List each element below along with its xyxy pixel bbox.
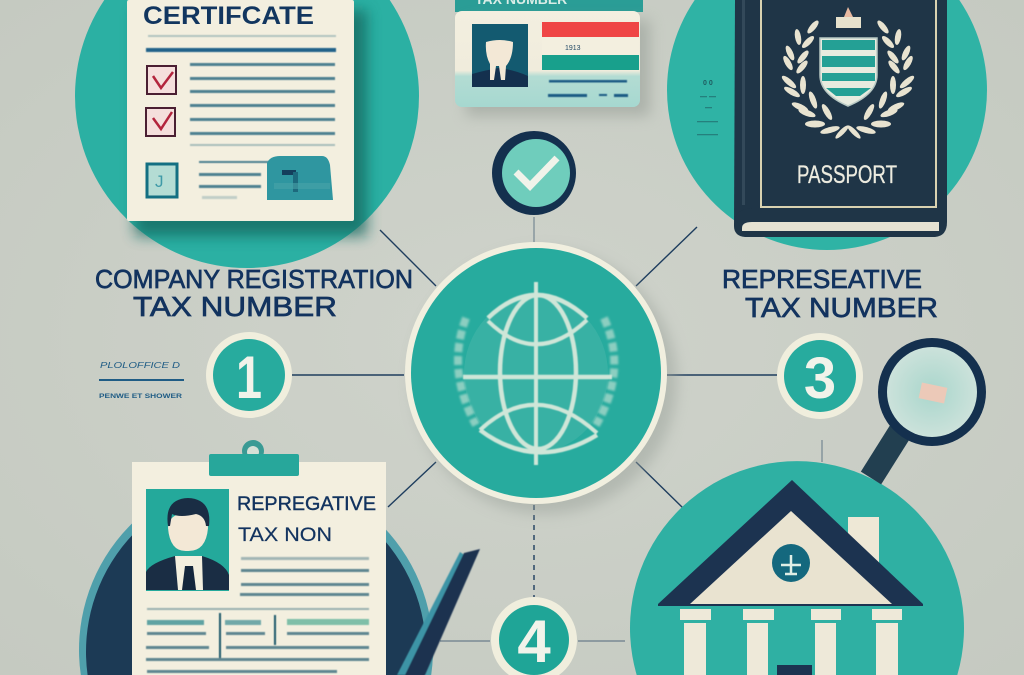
faded text beside passport: — <box>705 105 712 112</box>
columns <box>680 609 902 675</box>
id photo <box>472 24 528 87</box>
icon: magnifying glass <box>871 338 986 478</box>
certificate shadow <box>135 10 367 236</box>
small caption left: PENWE ET SHOWER <box>99 393 182 400</box>
pen <box>397 549 480 675</box>
dark circle backdrop <box>79 473 433 675</box>
red checkbox 1 <box>147 66 176 94</box>
passport cover <box>734 0 947 237</box>
crown <box>836 7 861 28</box>
certificate title: CERTIFCATE <box>143 2 314 30</box>
faded text beside passport <box>697 80 718 139</box>
spine <box>742 0 745 205</box>
card body <box>455 11 640 107</box>
panel: passport <box>667 0 987 250</box>
laurel <box>458 318 614 425</box>
faded text beside passport: — — <box>700 94 716 101</box>
gold border <box>761 0 936 207</box>
passport title: PASSPORT <box>797 161 897 189</box>
label: company registration tax number: COMPANY REGISTRATION <box>95 264 413 294</box>
teal seal box: J <box>155 172 164 191</box>
pediment <box>690 511 892 604</box>
certificate lines <box>146 35 336 199</box>
step 4 badge: 4 <box>517 608 551 675</box>
flag stripes <box>542 22 639 70</box>
step 1 badge <box>206 332 292 418</box>
central globe badge <box>405 242 677 514</box>
chimney <box>848 517 879 577</box>
panel: tax office building <box>630 461 964 675</box>
card text lines <box>548 80 628 97</box>
door <box>777 665 812 675</box>
faded text beside passport: 0 0 <box>703 80 713 87</box>
red checkbox 2 <box>146 108 175 136</box>
page edges <box>742 222 939 231</box>
label: company registration tax number <box>95 264 413 322</box>
badge shadow <box>413 250 677 514</box>
step 3 badge <box>777 333 863 419</box>
teal circle backdrop <box>75 0 419 268</box>
document subtitle: TAX NON <box>238 525 332 546</box>
panel: id card <box>455 0 650 116</box>
cover fold <box>735 208 947 228</box>
step 4 badge <box>491 597 577 675</box>
label: representative tax number <box>722 264 938 323</box>
faded text beside passport: ——— <box>697 119 718 126</box>
label: company registration tax number: TAX NUMBER <box>133 291 337 322</box>
card header strip <box>455 0 643 12</box>
roof <box>658 480 923 606</box>
globe fill <box>464 296 608 452</box>
teal circle backdrop <box>667 0 987 250</box>
step 3 badge: 3 <box>804 346 836 411</box>
document title: REPREGATIVE <box>237 494 376 515</box>
badge disc <box>405 242 667 504</box>
faded text beside passport: ——— <box>697 132 718 139</box>
label: representative tax number: REPRESEATIVE <box>722 264 922 294</box>
shield <box>820 38 877 106</box>
flag stripes: 1913 <box>565 45 581 52</box>
connector lines <box>292 217 822 641</box>
certificate sheet <box>127 0 354 221</box>
emblem <box>772 544 810 582</box>
teal blob <box>630 461 964 675</box>
portrait <box>146 489 229 591</box>
stamp <box>267 156 333 200</box>
globe <box>463 282 612 465</box>
panel: company certificate <box>75 0 419 268</box>
step 1 badge: 1 <box>236 344 262 411</box>
document lines <box>146 557 369 673</box>
label: representative tax number: TAX NUMBER <box>745 292 938 323</box>
teal seal box <box>147 164 177 197</box>
small caption left: PLOLOFFICE D <box>100 361 180 370</box>
icon: check badge <box>492 131 576 215</box>
card shadow <box>466 20 650 116</box>
document sheet <box>132 462 386 675</box>
clip <box>209 440 299 476</box>
panel: representative document <box>79 440 480 675</box>
small caption left <box>99 361 184 400</box>
laurel wreath <box>780 19 916 140</box>
